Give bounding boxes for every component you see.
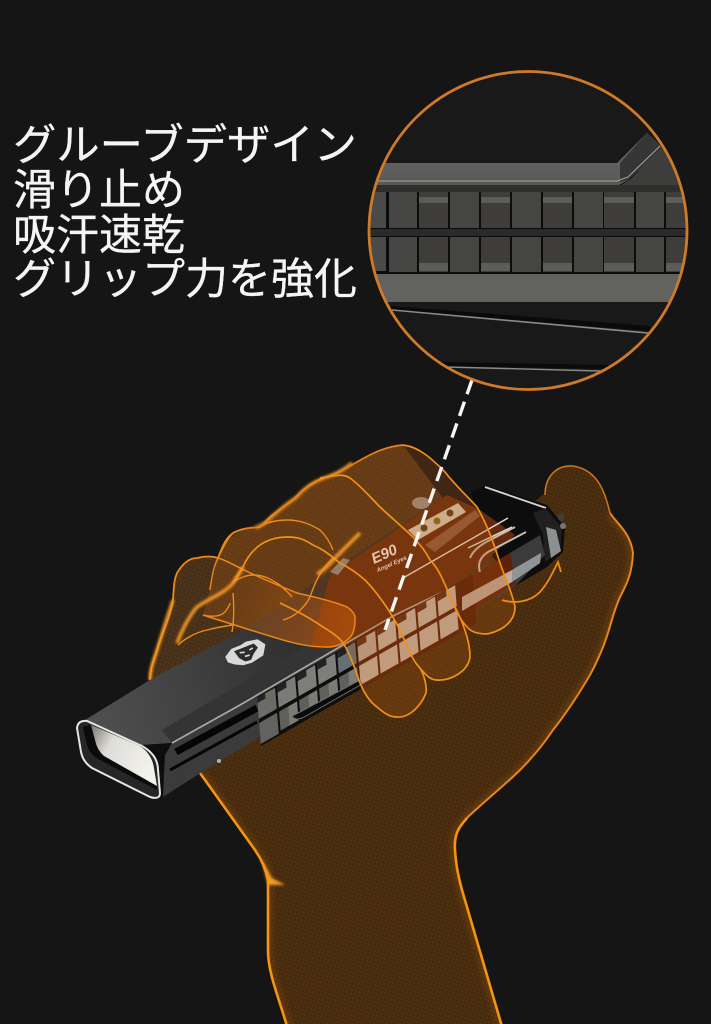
flashlight: inner rim [83,725,157,790]
flashlight: model label: E90 [369,541,401,568]
finger: ring outline [280,603,426,717]
hand: outer knuckle outline [150,445,403,680]
flashlight: top face [85,495,515,745]
zoom: orange ring [369,72,687,390]
flashlight: brown side section [345,553,516,683]
zoom: dark wedge [622,148,679,185]
finger: crease lines [178,520,333,645]
thumb web line [502,562,561,602]
hand: palm and thumb [200,466,633,1024]
fingers: translucent fill [203,445,515,717]
flashlight: side slot [470,527,526,572]
zoom: top plate [360,133,662,186]
flashlight: buttons [408,497,480,552]
title text: 吸汗速乾 [13,212,185,260]
flashlight: upper black groove [176,708,257,752]
zoom: grip body [370,192,686,274]
finger: index outline [320,445,515,634]
flashlight: top white lines [403,518,512,578]
flashlight: lower groove [170,722,257,770]
flashlight [77,485,566,798]
title text: グリップ力を強化 [13,256,357,304]
zoom circle [360,72,700,390]
title text: グルーブデザイン [13,122,357,170]
flashlight: model label: Angel Eyes [375,555,409,574]
title text [13,122,357,304]
finger: glow highlights [177,533,360,643]
finger: little outline [203,558,355,647]
finger: middle outline [233,537,470,680]
hand: fingers over flashlight [177,445,561,717]
zoom: bottom plate [376,274,680,302]
flashlight: end cap gray [330,558,350,575]
zoom: grip blocks [360,192,696,272]
dashed callout line [385,380,472,630]
flashlight: front shoulder [142,743,172,797]
finger: little tip fill [203,558,355,647]
flashlight: raised plate [162,645,343,743]
hand: back of fingers [150,445,512,735]
flashlight: silver side strip [462,553,541,611]
flashlight: clip [292,680,362,719]
flashlight: side button [217,759,221,763]
flashlight: lens [91,725,157,786]
flashlight: rail highlight [172,585,457,743]
flashlight: logo [223,637,269,669]
zoom: ramp [620,133,662,182]
flashlight: tail cap [472,485,566,586]
flashlight: grip squares [257,574,476,746]
title text: 滑り止め [13,167,185,215]
flashlight: brown top plate [310,495,515,650]
flashlight: front bezel [77,721,160,798]
flashlight: side body [145,535,545,797]
flashlight: model label [368,539,409,574]
zoom: lower lines [390,306,650,331]
